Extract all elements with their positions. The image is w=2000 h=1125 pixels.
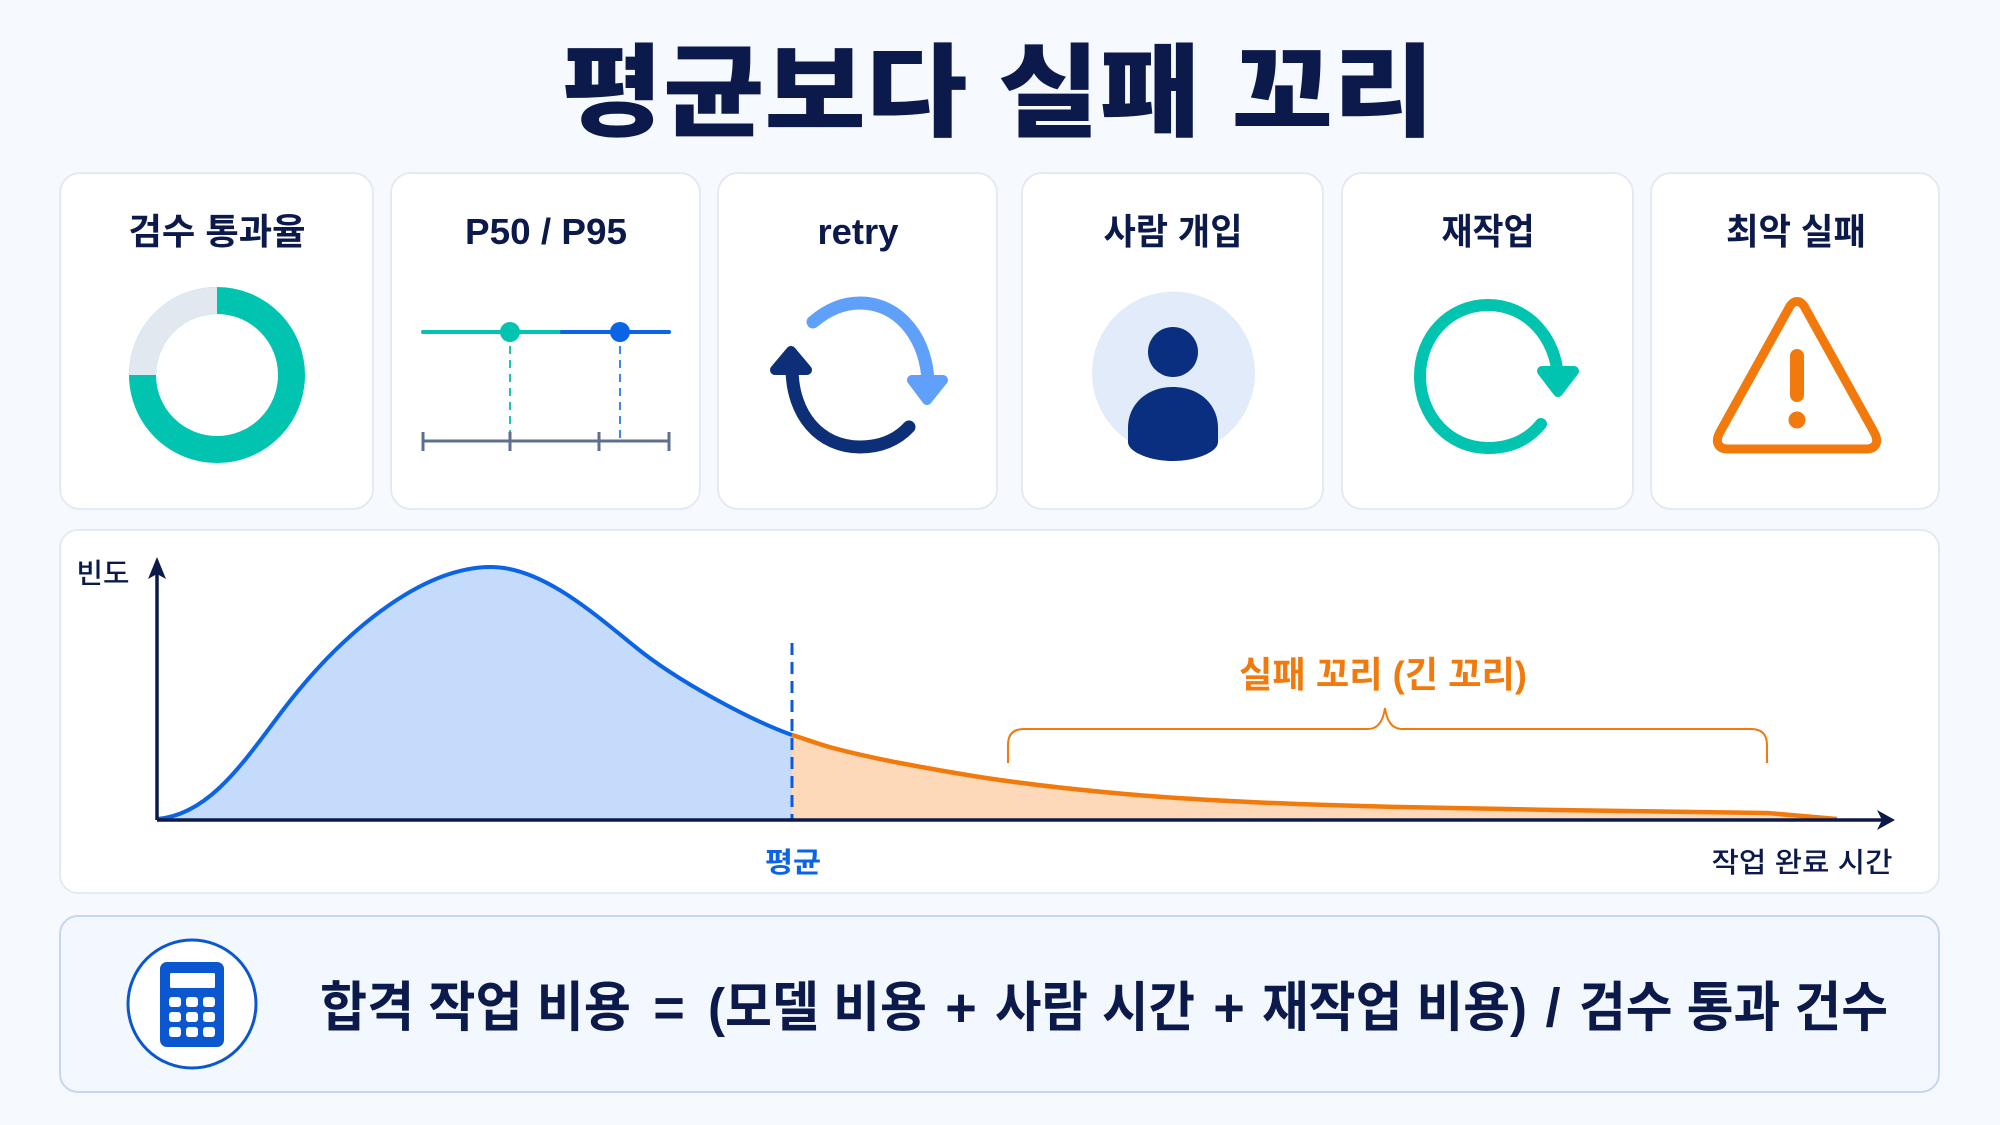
formula text: + [945, 978, 977, 1038]
formula text: 사람 시간 [995, 978, 1195, 1038]
curve: orange tail [792, 735, 1837, 819]
formula text: / [1545, 978, 1561, 1038]
curve: blue [157, 567, 792, 819]
heading: 재작업 [1442, 211, 1534, 252]
formula text: (모델 비용 [708, 978, 927, 1038]
formula text: 검수 통과 건수 [1579, 978, 1888, 1038]
formula text: 합격 작업 비용 [320, 978, 631, 1038]
formula text: + [1213, 978, 1245, 1038]
formula text: 재작업 비용) [1262, 978, 1527, 1038]
icon: rework arrow [1420, 305, 1574, 448]
icon: person [1092, 292, 1255, 461]
heading: P50 / P95 [465, 211, 627, 252]
heading: 사람 개입 [1104, 211, 1242, 252]
panel: 최악 실패 [1651, 173, 1939, 509]
percentile diagram [423, 322, 669, 451]
area: mean side [157, 567, 792, 820]
heading: 최악 실패 [1726, 211, 1866, 252]
axes [148, 557, 1895, 830]
panel: P50 / P95 [391, 173, 700, 509]
area: failure tail [792, 735, 1837, 820]
icon: warning triangle [1717, 302, 1877, 449]
title: 평균보다 실패 꼬리 [562, 38, 1434, 150]
panel: 검수 통과율 [60, 173, 373, 509]
formula text [320, 978, 1888, 1038]
mean marker [790, 643, 794, 820]
donut chart [142, 300, 292, 450]
panel: formula [60, 916, 1939, 1092]
axis label: completion time: 작업 완료 시간 [1712, 847, 1892, 878]
heading: retry [818, 211, 898, 252]
bracket: failure tail [1008, 708, 1767, 763]
axis label: frequency: 빈도 [76, 558, 130, 589]
formula text: = [653, 978, 685, 1038]
axis label: mean: 평균 [765, 847, 821, 878]
panel: 사람 개입 [1022, 173, 1323, 509]
heading: 검수 통과율 [128, 211, 306, 252]
icon: calculator [128, 940, 256, 1068]
panel: retry [718, 173, 997, 509]
icon: retry arrows [775, 303, 943, 447]
panel: distribution chart [60, 530, 1939, 893]
panel: 재작업 [1342, 173, 1633, 509]
callout: failure tail: 실패 꼬리 (긴 꼬리) [1239, 654, 1527, 695]
